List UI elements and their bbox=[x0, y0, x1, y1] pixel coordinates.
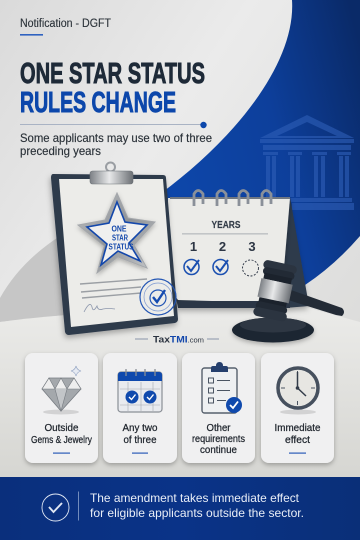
card: other requirements continue bbox=[182, 353, 255, 463]
clipboard clip bbox=[90, 162, 133, 184]
subtitle bbox=[20, 131, 212, 158]
document lines bbox=[80, 279, 147, 298]
subtitle: preceding years bbox=[20, 144, 101, 158]
star text: ONE bbox=[112, 224, 127, 234]
card label bbox=[192, 422, 245, 456]
title: RULES CHANGE bbox=[20, 87, 176, 119]
card label: Immediate bbox=[274, 422, 321, 434]
calendar numbers: 2 bbox=[219, 239, 226, 254]
title: ONE STAR STATUS bbox=[20, 58, 205, 90]
card label: Any two bbox=[122, 422, 158, 434]
blue swoosh bbox=[150, 0, 360, 285]
title bbox=[20, 58, 205, 119]
footer text: The amendment takes immediate effect bbox=[90, 491, 300, 505]
eyebrow: Notification - DGFT: Notification - DGFT bbox=[20, 18, 111, 30]
calendar rings bbox=[194, 190, 271, 206]
card label: requirements bbox=[192, 433, 245, 445]
card label: effect bbox=[285, 434, 310, 446]
star badge bbox=[78, 193, 155, 273]
card label: Gems & Jewelry bbox=[31, 434, 93, 446]
gavel bbox=[232, 259, 344, 342]
clipboard bbox=[51, 162, 178, 335]
icon: calendar bbox=[118, 369, 162, 412]
calendar heading: YEARS bbox=[212, 219, 240, 231]
star text bbox=[108, 224, 134, 252]
icon: diamond bbox=[42, 366, 81, 414]
calendar numbers bbox=[190, 239, 256, 254]
footer banner bbox=[0, 477, 360, 540]
footer text bbox=[90, 491, 304, 520]
card label bbox=[31, 422, 93, 446]
title rule with dot bbox=[20, 122, 207, 128]
card: any two of three bbox=[103, 353, 177, 463]
card label: continue bbox=[200, 444, 237, 456]
wall shadow bbox=[0, 236, 75, 322]
brand: TaxTMI.com: TaxTMI.com bbox=[153, 334, 204, 346]
floor bbox=[0, 307, 360, 477]
approval stamp bbox=[140, 279, 176, 315]
star text: STAR bbox=[112, 234, 128, 242]
icon: clock bbox=[278, 368, 318, 414]
card label bbox=[274, 422, 321, 446]
icon: check circle bbox=[42, 494, 69, 521]
card label: Other bbox=[206, 422, 231, 434]
desk calendar bbox=[168, 190, 309, 308]
icon: checklist clipboard bbox=[202, 362, 242, 413]
icon: bank building bbox=[260, 115, 354, 210]
card: immediate effect bbox=[261, 353, 334, 463]
card: outside gems and jewelry bbox=[25, 353, 98, 463]
subtitle: Some applicants may use two of three bbox=[20, 131, 212, 145]
brand: TaxTMI.com bbox=[135, 334, 219, 346]
card label: Outside bbox=[44, 422, 79, 434]
calendar numbers: 3 bbox=[248, 239, 256, 254]
eyebrow underline bbox=[20, 34, 43, 36]
footer text: for eligible applicants outside the sector. bbox=[90, 506, 304, 520]
year checks bbox=[184, 260, 258, 276]
calendar numbers: 1 bbox=[190, 239, 197, 254]
star text: STATUS bbox=[108, 242, 134, 252]
card label: of three bbox=[124, 434, 157, 446]
card label bbox=[122, 422, 158, 446]
signature bbox=[84, 304, 115, 312]
